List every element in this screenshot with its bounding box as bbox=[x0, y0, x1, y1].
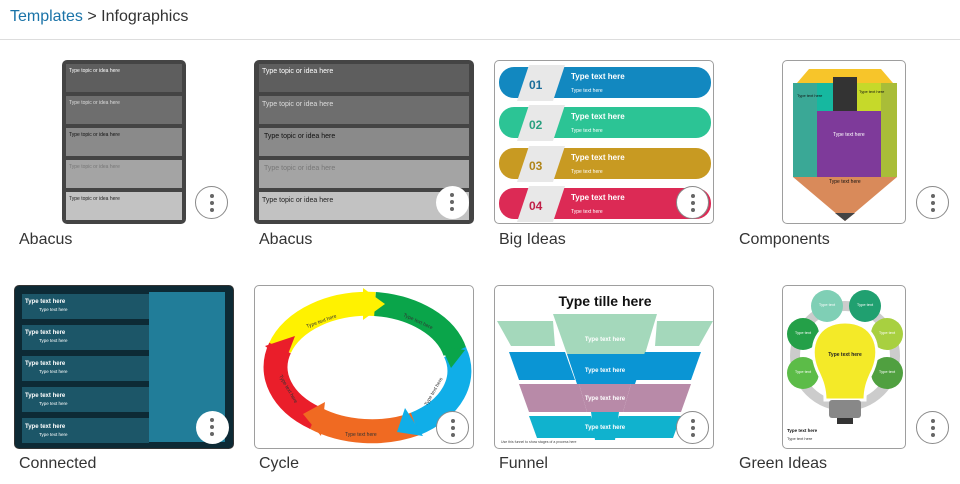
menu button bbox=[196, 411, 229, 444]
thumbnail: funnel: Type text here bbox=[585, 425, 626, 431]
menu button bbox=[676, 411, 709, 444]
thumbnail: big ideas banners: 03 bbox=[529, 159, 543, 173]
label: Connected bbox=[19, 455, 96, 472]
thumbnail: abacus wide: Type topic or idea here bbox=[262, 101, 333, 108]
thumbnail: abacus portrait: Type topic or idea here bbox=[69, 196, 120, 202]
thumbnail: pencil components: Type text here bbox=[829, 179, 861, 185]
menu button bbox=[916, 186, 949, 219]
card: Abacus 1 bbox=[19, 60, 228, 248]
menu button bbox=[436, 186, 469, 219]
label: Cycle bbox=[259, 455, 299, 472]
thumbnail: funnel: Use this funnel to show stages of a process here bbox=[501, 440, 577, 444]
thumbnail: funnel: Type text here bbox=[585, 337, 626, 343]
thumbnail: abacus wide: Type topic or idea here bbox=[262, 197, 333, 204]
menu button bbox=[195, 186, 228, 219]
thumbnail: funnel: Type tille here bbox=[558, 293, 652, 309]
thumbnail: cycle arrows: Type text here bbox=[277, 374, 298, 405]
thumbnail: abacus portrait: Type topic or idea here bbox=[69, 132, 120, 138]
thumbnail: big ideas banners: Type text here bbox=[571, 72, 625, 81]
thumbnail: big ideas banners: Type text here bbox=[571, 128, 603, 134]
thumbnail: pencil components bbox=[782, 60, 906, 224]
thumbnail: connected panels: Type text here bbox=[39, 369, 68, 374]
menu button bbox=[916, 411, 949, 444]
thumbnail: light bulb: Type text bbox=[795, 330, 812, 335]
thumbnail: cycle arrows: Type text here bbox=[424, 376, 445, 407]
thumbnail: abacus portrait: Type topic or idea here bbox=[69, 100, 120, 106]
thumbnail: connected panels: Type text here bbox=[39, 401, 68, 406]
thumbnail: abacus wide: Type topic or idea here bbox=[264, 165, 335, 172]
thumbnail: light bulb: Type text bbox=[879, 369, 896, 374]
menu button bbox=[436, 411, 469, 444]
thumbnail: light bulb bbox=[782, 285, 906, 449]
card: Funnel bbox=[494, 285, 714, 472]
label: Big Ideas bbox=[499, 231, 566, 248]
label: Components bbox=[739, 231, 830, 248]
thumbnail: big ideas banners: 01 bbox=[529, 78, 543, 92]
thumbnail: funnel bbox=[494, 285, 714, 449]
card: Green Ideas bbox=[739, 285, 949, 472]
thumbnail: cycle arrows: Type text here bbox=[345, 432, 377, 438]
thumbnail: light bulb: Type text here bbox=[787, 436, 813, 441]
thumbnail: connected panels: Type text here bbox=[25, 299, 66, 305]
card: Big Ideas bbox=[494, 60, 714, 248]
thumbnail: connected panels: Type text here bbox=[39, 432, 68, 437]
thumbnail: big ideas banners: Type text here bbox=[571, 209, 603, 215]
thumbnail: light bulb: Type text bbox=[857, 302, 874, 307]
label: Abacus bbox=[19, 231, 72, 248]
thumbnail: connected panels: Type text here bbox=[25, 393, 66, 399]
thumbnail: big ideas banners bbox=[494, 60, 714, 224]
thumbnail: light bulb: Type text bbox=[795, 369, 812, 374]
thumbnail: big ideas banners: Type text here bbox=[571, 88, 603, 94]
thumbnail: connected panels: Type text here bbox=[25, 424, 66, 430]
thumbnail: connected panels: Type text here bbox=[39, 307, 68, 312]
thumbnail: big ideas banners: Type text here bbox=[571, 153, 625, 162]
card: Components bbox=[739, 60, 949, 248]
thumbnail: abacus portrait: Type topic or idea here bbox=[69, 68, 120, 74]
thumbnail: cycle arrows: Type text here bbox=[402, 312, 434, 331]
thumbnail: big ideas banners: 04 bbox=[529, 199, 543, 213]
thumbnail: big ideas banners: Type text here bbox=[571, 169, 603, 175]
thumbnail: connected panels bbox=[14, 285, 234, 449]
thumbnail: abacus wide bbox=[254, 60, 474, 224]
thumbnail: funnel: Type text here bbox=[585, 368, 626, 374]
thumbnail: abacus portrait bbox=[62, 60, 186, 224]
thumbnail: abacus wide: Type topic or idea here bbox=[262, 68, 333, 75]
thumbnail: light bulb: Type text here bbox=[787, 428, 818, 433]
thumbnail: pencil components: Type text here bbox=[797, 93, 823, 98]
thumbnail: big ideas banners: Type text here bbox=[571, 112, 625, 121]
thumbnail: connected panels: Type text here bbox=[25, 330, 66, 336]
label: Abacus bbox=[259, 231, 312, 248]
thumbnail: cycle arrows: Type text here bbox=[306, 313, 338, 330]
thumbnail: light bulb: Type text here bbox=[828, 352, 862, 358]
card: Cycle bbox=[254, 285, 474, 472]
thumbnail: connected panels: Type text here bbox=[25, 361, 66, 367]
thumbnail: pencil components: Type text here bbox=[833, 132, 865, 138]
card: Abacus 2 bbox=[254, 60, 474, 248]
label: Green Ideas bbox=[739, 455, 827, 472]
thumbnail: connected panels: Type text here bbox=[39, 338, 68, 343]
thumbnail: light bulb: Type text bbox=[879, 330, 896, 335]
menu button bbox=[676, 186, 709, 219]
thumbnail: cycle arrows bbox=[254, 285, 474, 449]
thumbnail: big ideas banners: Type text here bbox=[571, 193, 625, 202]
thumbnail: light bulb: Type text bbox=[819, 302, 836, 307]
thumbnail: abacus wide: Type topic or idea here bbox=[264, 133, 335, 140]
thumbnail: pencil components: Type text here bbox=[859, 89, 885, 94]
thumbnail: abacus portrait: Type topic or idea here bbox=[69, 164, 120, 170]
thumbnail: big ideas banners: 02 bbox=[529, 118, 543, 132]
thumbnail: funnel: Type text here bbox=[585, 396, 626, 402]
label: Funnel bbox=[499, 455, 548, 472]
breadcrumb: Templates > Infographics bbox=[10, 8, 188, 25]
card: Connected bbox=[14, 285, 234, 472]
